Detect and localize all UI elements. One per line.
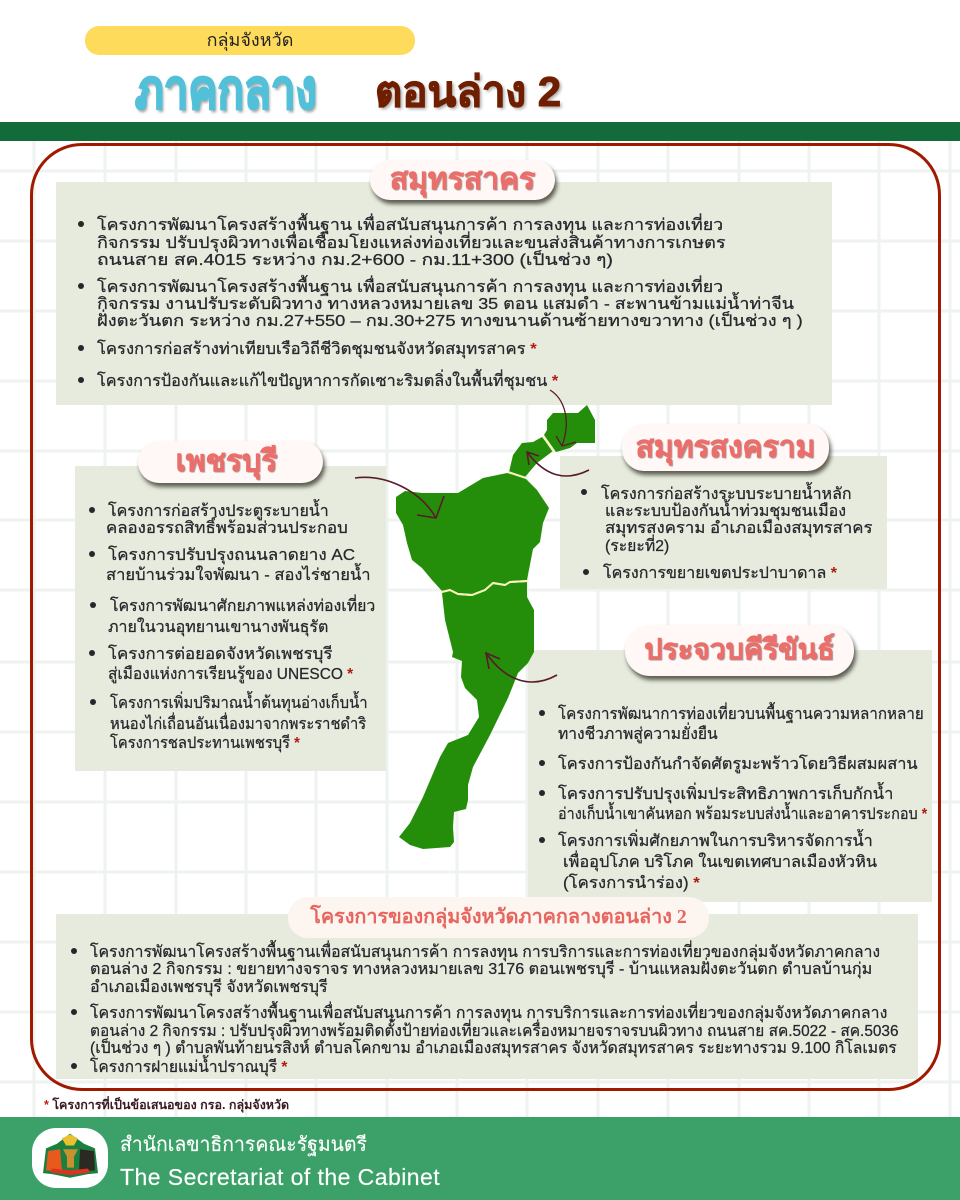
- heading: Samut Sakhon: สมุทรสาคร: [390, 163, 535, 196]
- arrow: Prachuap Khiri Khan: [485, 652, 558, 683]
- panel: Samut Sakhon: โครงการพัฒนาโครงสร้างพื้นฐาน เพื่อสนับสนุนการค้า การลงทุน และการท่องเที่ยว: [97, 279, 723, 296]
- panel: Samut Songkhram: และระบบป้องกันน้ำท่วมชุมชนเมือง: [605, 503, 846, 520]
- panel: group projects: โครงการพัฒนาโครงสร้างพื้นฐานเพื่อสนับสนุนการค้า การลงทุน การบริการและการท่องเที่ยวของกลุ่มจังหวัดภาคกลาง: [90, 1005, 887, 1022]
- green header band: [0, 122, 960, 141]
- heading: group projects: โครงการของกลุ่มจังหวัดภาคกลางตอนล่าง 2: [310, 906, 687, 928]
- panel: Prachuap Khiri Khan: โครงการป้องกันกำจัดศัตรูมะพร้าวโดยวิธีผสมผสาน: [558, 756, 918, 773]
- heading: group projects: [288, 897, 709, 938]
- panel: Prachuap Khiri Khan: โครงการปรับปรุงเพิ่มประสิทธิภาพการเก็บกักน้ำ: [558, 786, 893, 803]
- panel: Prachuap Khiri Khan: (โครงการนำร่อง) *: [563, 875, 700, 892]
- panel: Phetchaburi: โครงการพัฒนาศักยภาพแหล่งท่องเที่ยว: [110, 598, 375, 615]
- panel: Phetchaburi: ภายในวนอุทยานเขานางพันธุรัต: [108, 619, 328, 636]
- panel: Samut Songkhram: โครงการก่อสร้างระบบระบายน้ำหลัก: [601, 486, 852, 503]
- panel: Samut Sakhon: โครงการก่อสร้างท่าเทียบเรือวิถีชีวิตชุมชนจังหวัดสมุทรสาคร *: [97, 341, 537, 358]
- panel: Samut Songkhram: [560, 456, 887, 589]
- heading: Phetchaburi: เพชรบุรี: [176, 445, 277, 478]
- panel: Phetchaburi: [75, 466, 386, 771]
- panel: Phetchaburi: โครงการก่อสร้างประตูระบายน้ำ: [108, 503, 329, 520]
- heading: Samut Songkhram: สมุทรสงคราม: [636, 431, 815, 464]
- footer band: [0, 1117, 960, 1200]
- heading: Samut Sakhon: [370, 160, 555, 200]
- heading: Prachuap Khiri Khan: ประจวบคีรีขันธ์: [644, 634, 835, 666]
- panel: Phetchaburi: สู่เมืองแห่งการเรียนรู้ของ UNESCO *: [108, 666, 353, 683]
- panel: group projects: อำเภอเมืองเพชรบุรี จังหวัดเพชรบุรี: [90, 979, 328, 996]
- panel: Samut Sakhon: กิจกรรม งานปรับระดับผิวทาง ทางหลวงหมายเลข 35 ตอน แสมดำ - สะพานข้ามแม่น้ำท่าจีน: [97, 296, 794, 313]
- footer organisation name: [120, 1134, 440, 1190]
- footer organisation name: สำนักเลขาธิการคณะรัฐมนตรี: [120, 1134, 367, 1156]
- panel: group projects: ตอนล่าง 2 กิจกรรม : ขยายทางจราจร ทางหลวงหมายเลข 3176 ตอนเพชรบุรี - บ้านแหลมฝั่งตะวันตก ตำบลบ้านกุ่ม: [90, 961, 872, 978]
- panel: Phetchaburi: สายบ้านร่วมใจพัฒนา - สองไร่ชายน้ำ: [106, 567, 371, 584]
- footnote: * โครงการที่เป็นข้อเสนอของ กรอ. กลุ่มจังหวัด: [44, 1098, 289, 1112]
- logo: cabinet secretariat emblem: [32, 1128, 108, 1188]
- panel: Phetchaburi: โครงการต่อยอดจังหวัดเพชรบุรี: [108, 646, 332, 663]
- title: ภาคกลาง: [135, 60, 317, 120]
- panel: group projects: โครงการพัฒนาโครงสร้างพื้นฐานเพื่อสนับสนุนการค้า การลงทุน การบริการและการท่องเที่ยวของกลุ่มจังหวัดภาคกลาง: [90, 944, 880, 961]
- panel: Prachuap Khiri Khan: โครงการพัฒนาการท่องเที่ยวบนพื้นฐานความหลากหลาย: [558, 706, 924, 723]
- yellow label: province group: [85, 26, 415, 55]
- panel: Prachuap Khiri Khan: อ่างเก็บน้ำเขาคันหอก พร้อมระบบส่งน้ำและอาคารประกอบ *: [558, 806, 927, 823]
- panel: Prachuap Khiri Khan: ทางชีวภาพสู่ความยั่งยืน: [558, 726, 718, 743]
- panel: Samut Sakhon: ฝั่งตะวันตก ระหว่าง กม.27+550 – กม.30+275 ทางขนานด้านซ้ายทางขวาทาง (เป็นช่วง ๆ ): [97, 313, 803, 330]
- panel: Samut Sakhon: [56, 182, 832, 405]
- arrow: Samut Songkhram: [526, 450, 590, 477]
- heading: Prachuap Khiri Khan: [625, 625, 854, 676]
- panel: Samut Sakhon: โครงการพัฒนาโครงสร้างพื้นฐาน เพื่อสนับสนุนการค้า การลงทุน และการท่องเที่ยว: [97, 217, 723, 234]
- footer organisation name: The Secretariat of the Cabinet: [120, 1164, 440, 1190]
- panel: Samut Songkhram: สมุทรสงคราม อำเภอเมืองสมุทรสาคร: [605, 520, 872, 537]
- panel: Prachuap Khiri Khan: เพื่ออุปโภค บริโภค ในเขตเทศบาลเมืองหัวหิน: [563, 854, 877, 871]
- title: [135, 60, 564, 120]
- panel: Samut Songkhram: (ระยะที่2): [605, 538, 669, 555]
- map of provinces: [396, 405, 595, 849]
- arrow: Phetchaburi: [354, 476, 445, 519]
- panel: Phetchaburi: คลองอรรถสิทธิ์พร้อมส่วนประกอบ: [106, 520, 348, 537]
- panel: Prachuap Khiri Khan: [528, 650, 932, 902]
- panel: Prachuap Khiri Khan: โครงการเพิ่มศักยภาพในการบริหารจัดการน้ำ: [558, 833, 873, 850]
- heading: Samut Songkhram: [622, 424, 829, 471]
- panel: Samut Sakhon: โครงการป้องกันและแก้ไขปัญหาการกัดเซาะริมตลิ่งในพื้นที่ชุมชน *: [97, 373, 558, 390]
- panel: Samut Sakhon: กิจกรรม ปรับปรุงผิวทางเพื่อเชื่อมโยงแหล่งท่องเที่ยวและขนส่งสินค้าทางการเกษตร: [97, 235, 726, 252]
- panel: group projects: โครงการฝายแม่น้ำปราณบุรี *: [90, 1059, 287, 1076]
- panel: Phetchaburi: โครงการปรับปรุงถนนลาดยาง AC: [108, 547, 355, 564]
- panel: group projects: [56, 914, 918, 1079]
- arrow: Samut Sakhon: [550, 390, 576, 447]
- panel: Samut Songkhram: โครงการขยายเขตประปาบาดาล *: [603, 565, 837, 582]
- heading: Phetchaburi: [138, 441, 323, 483]
- panel: group projects: ตอนล่าง 2 กิจกรรม : ปรับปรุงผิวทางพร้อมติดตั้งป้ายท่องเที่ยวและเครื่องหมายจราจรบนผิวทาง ถนนสาย สค.5022 - สค.5036: [90, 1023, 899, 1040]
- title: ตอนล่าง 2: [375, 68, 561, 115]
- panel: Samut Sakhon: ถนนสาย สค.4015 ระหว่าง กม.2+600 - กม.11+300 (เป็นช่วง ๆ): [97, 252, 613, 269]
- panel: Phetchaburi: โครงการชลประทานเพชรบุรี *: [110, 735, 300, 752]
- red rounded frame: [30, 143, 941, 1091]
- panel: Phetchaburi: โครงการเพิ่มปริมาณน้ำต้นทุนอ่างเก็บน้ำ: [110, 695, 368, 712]
- yellow label: province group: กลุ่มจังหวัด: [207, 30, 293, 50]
- panel: Phetchaburi: หนองไก่เถื่อนอันเนื่องมาจากพระราชดำริ: [110, 716, 366, 733]
- panel: group projects: (เป็นช่วง ๆ ) ตำบลพันท้ายนรสิงห์ ตำบลโคกขาม อำเภอเมืองสมุทรสาคร จังหวัดสมุทรสาคร ระยะทางรวม 9.100 กิโลเมตร: [90, 1040, 897, 1057]
